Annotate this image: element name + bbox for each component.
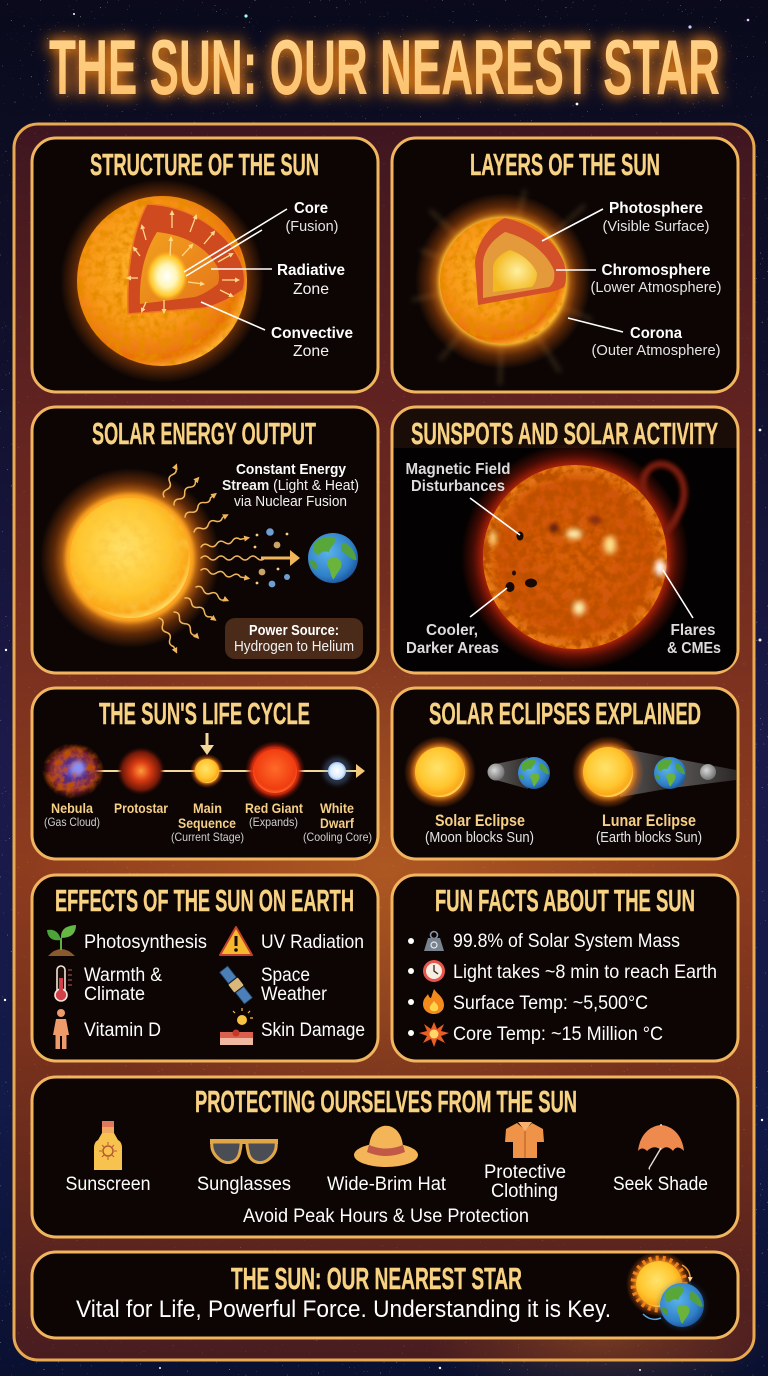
fact text [453, 931, 717, 1045]
panel: protecting ourselves from the sun [32, 1077, 738, 1237]
stage labels [44, 800, 372, 844]
callout: power source: Hydrogen to Helium [234, 638, 354, 655]
labels: Photosphere [609, 200, 703, 217]
eclipse labels: Solar Eclipse [435, 811, 525, 830]
labels: (Visible Surface) [602, 218, 710, 235]
icon: flame [423, 989, 444, 1014]
labels: Zone [293, 343, 329, 360]
labels [590, 200, 722, 359]
diagram: solar eclipse [404, 736, 550, 808]
fact text: 99.8% of Solar System Mass [453, 931, 680, 952]
callout lines [542, 209, 623, 332]
solar particles [254, 528, 290, 587]
stage: red giant [245, 741, 305, 801]
effect labels: Weather [261, 984, 328, 1005]
bullets [408, 938, 414, 1036]
icon: skin and sun [220, 1008, 253, 1045]
closing message: Vital for Life, Powerful Force. Understanding it is Key. [76, 1296, 611, 1323]
labels: Core [294, 200, 328, 217]
eclipse labels: Lunar Eclipse [602, 811, 696, 830]
icon: core burst [419, 1022, 449, 1047]
stage: nebula [42, 743, 104, 799]
labels: (Lower Atmosphere) [590, 279, 722, 296]
protection tip: Avoid Peak Hours & Use Protection [243, 1206, 529, 1227]
icon: person [53, 1009, 69, 1049]
callout lines [470, 498, 693, 618]
protection labels: Sunglasses [197, 1174, 291, 1195]
labels: (Fusion) [286, 218, 339, 235]
heading: THE SUN'S LIFE CYCLE [99, 696, 310, 731]
effect labels: Skin Damage [261, 1020, 365, 1041]
heading: EFFECTS OF THE SUN ON EARTH [55, 883, 354, 918]
fact text: Light takes ~8 min to reach Earth [453, 962, 717, 983]
eclipse labels [425, 811, 702, 846]
labels: Cooler, [426, 622, 478, 639]
panel: solar energy output [32, 407, 378, 673]
callout lines [184, 209, 287, 330]
protection labels: Protective [484, 1162, 566, 1183]
layered sun illustration [412, 190, 592, 385]
labels: Zone [293, 281, 329, 298]
effect labels: Warmth & [84, 965, 162, 986]
icon: satellite [219, 966, 253, 1004]
eclipse labels: (Earth blocks Sun) [596, 829, 702, 846]
labels: Magnetic Field [406, 461, 510, 478]
labels: & CMEs [667, 640, 721, 657]
protection labels: Sunscreen [66, 1174, 150, 1195]
energy stream text: Constant Energy [236, 461, 347, 478]
fact text: Surface Temp: ~5,500°C [453, 993, 648, 1014]
icon: protective clothing [505, 1122, 544, 1158]
heading: THE SUN: OUR NEAREST STAR [231, 1261, 522, 1296]
timeline [93, 764, 365, 778]
icon: plant [47, 925, 76, 956]
callout: power source [225, 618, 363, 659]
heading: SOLAR ENERGY OUTPUT [92, 416, 316, 451]
icon: weight [424, 932, 444, 951]
panel: sunspots and solar activity [392, 407, 738, 673]
panel: closing banner [32, 1251, 738, 1338]
heading: STRUCTURE OF THE SUN [90, 147, 319, 182]
labels [406, 461, 721, 657]
stage labels: (Cooling Core) [303, 830, 372, 844]
stage: main sequence [190, 754, 224, 788]
labels: Corona [630, 325, 682, 342]
protection labels: Seek Shade [613, 1174, 708, 1195]
stage labels: Main [193, 800, 222, 816]
labels: Darker Areas [406, 640, 499, 657]
stage labels: Protostar [114, 800, 168, 816]
panel: structure of the sun [32, 138, 378, 392]
stage labels: (Expands) [249, 815, 298, 829]
icon: warning [220, 927, 252, 955]
panel: layers of the sun [392, 138, 738, 392]
icon: clock [423, 960, 445, 982]
labels: Flares [670, 622, 716, 639]
protection labels: Clothing [491, 1181, 558, 1202]
arrow: current stage [200, 733, 214, 755]
labels: Disturbances [411, 478, 505, 495]
labels [271, 200, 353, 360]
panel: effects of the sun on earth [32, 875, 378, 1061]
protection labels: Wide-Brim Hat [327, 1174, 447, 1195]
sun cutaway illustration [60, 179, 264, 383]
labels: Radiative [277, 262, 345, 279]
diagram: lunar eclipse [572, 736, 736, 808]
icon: sun and earth [626, 1251, 706, 1329]
panel: solar eclipses explained [392, 688, 738, 859]
effect labels [84, 932, 365, 1041]
icon: umbrella [638, 1124, 684, 1169]
eclipse labels: (Moon blocks Sun) [425, 829, 534, 846]
effect labels: UV Radiation [261, 932, 364, 953]
labels: Chromosphere [602, 262, 711, 279]
callout: power source: Power Source: [249, 622, 339, 639]
energy stream text: via Nuclear Fusion [234, 493, 347, 510]
effect labels: Vitamin D [84, 1020, 161, 1041]
energy stream text [222, 461, 359, 510]
labels: Convective [271, 325, 353, 342]
effect labels: Photosynthesis [84, 932, 207, 953]
icon: earth [308, 533, 358, 583]
panel: the sun's life cycle [32, 688, 378, 859]
stage labels: Dwarf [320, 815, 354, 831]
icon: sunscreen [94, 1121, 122, 1170]
stage labels: Red Giant [245, 800, 303, 816]
effect labels: Climate [84, 984, 145, 1005]
stage labels: Nebula [51, 800, 93, 816]
stage: protostar [117, 747, 165, 795]
stage: white dwarf [323, 757, 351, 785]
energy stream text: Stream (Light & Heat) [222, 477, 359, 494]
energy wave arrows [157, 465, 300, 653]
stage labels: (Current Stage) [171, 830, 244, 844]
fact text: Core Temp: ~15 Million °C [453, 1024, 663, 1045]
stage labels: Sequence [178, 815, 236, 831]
icon: wide-brim hat [354, 1126, 418, 1167]
active sun illustration [461, 443, 689, 671]
panel: fun facts about the sun [392, 875, 738, 1061]
stage labels: (Gas Cloud) [44, 815, 100, 829]
black image area [394, 448, 736, 672]
icon: sunglasses [210, 1139, 278, 1163]
glowing sun [40, 468, 220, 648]
labels: (Outer Atmosphere) [592, 342, 721, 359]
effect labels: Space [261, 965, 310, 986]
protection labels [66, 1162, 708, 1202]
stage labels: White [320, 800, 354, 816]
icon: thermometer [55, 966, 72, 1001]
